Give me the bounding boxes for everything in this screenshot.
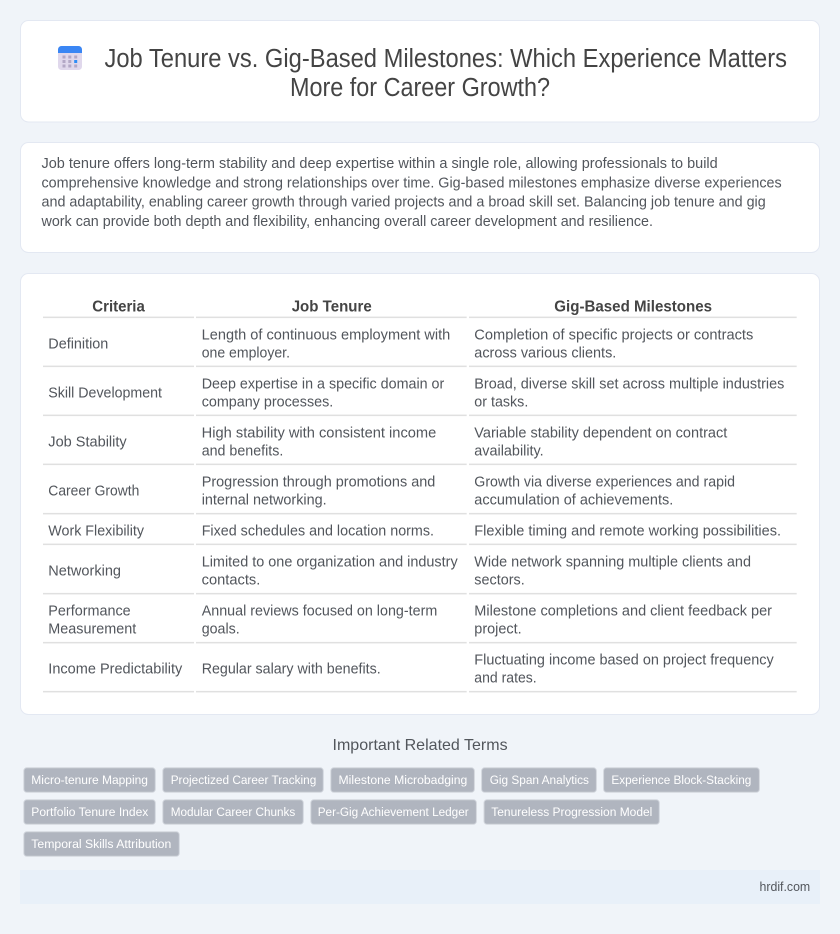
row: career growth — [48, 474, 735, 508]
row: skill development: company processes. — [202, 394, 333, 410]
row: networking: contacts. — [202, 572, 260, 588]
intro text: and adaptability, enabling career growth through varied projects and a broad skill set. Balancing job tenure and gig — [42, 195, 766, 211]
row: job stability — [48, 425, 727, 459]
table header row: Job Tenure — [292, 299, 372, 316]
row: career growth: accumulation of achievements. — [474, 492, 673, 508]
row: work flexibility — [48, 523, 781, 539]
tag: modular career chunks — [163, 800, 303, 824]
row: income predictability — [48, 652, 774, 686]
row: skill development: Skill Development — [48, 385, 162, 401]
row: networking: Limited to one organization and industry — [202, 554, 458, 570]
row: career growth: Progression through promotions and — [202, 474, 435, 490]
row: career growth: internal networking. — [202, 492, 327, 508]
row: job stability: Variable stability dependent on contract — [474, 425, 727, 441]
row: skill development: Deep expertise in a specific domain or — [202, 376, 444, 392]
row: definition: Definition — [48, 336, 108, 352]
table header row — [92, 299, 712, 316]
tag: tenureless progression model — [484, 800, 659, 824]
panel: introduction — [20, 142, 820, 252]
row: job stability: High stability with consistent income — [202, 425, 436, 441]
tag: micro-tenure mapping — [24, 768, 155, 792]
tag: experience block-stacking: Experience Block-Stacking — [611, 773, 751, 787]
row: performance measurement — [48, 603, 772, 637]
row: definition: one employer. — [202, 345, 290, 361]
table header row: Gig-Based Milestones — [554, 299, 712, 316]
row: work flexibility: Flexible timing and remote working possibilities. — [474, 523, 781, 539]
tag: projectized career tracking — [163, 768, 323, 792]
row: definition: Length of continuous employment with — [202, 327, 450, 343]
row: job stability: Job Stability — [48, 434, 127, 450]
tag: gig span analytics — [482, 768, 596, 792]
row: performance measurement: Milestone completions and client feedback per — [474, 603, 772, 619]
title: Job Tenure vs. Gig-Based Milestones: Which Experience Matters — [104, 45, 787, 73]
row: job stability: availability. — [474, 443, 544, 459]
row: skill development — [48, 376, 784, 410]
tag: experience block-stacking — [604, 768, 759, 792]
table header row: Criteria — [92, 299, 145, 316]
tag: tenureless progression model: Tenureless Progression Model — [491, 805, 652, 819]
tag: projectized career tracking: Projectized Career Tracking — [171, 773, 316, 787]
row: work flexibility: Work Flexibility — [48, 523, 145, 539]
row: income predictability: Income Predictability — [48, 661, 183, 677]
row: networking — [48, 554, 751, 588]
tag: temporal skills attribution — [24, 832, 179, 856]
tag: gig span analytics: Gig Span Analytics — [490, 773, 589, 787]
footer source text: hrdif.com — [760, 880, 810, 894]
title: More for Career Growth? — [290, 74, 550, 102]
row: income predictability: Fluctuating income based on project frequency — [474, 652, 774, 668]
tag: micro-tenure mapping: Micro-tenure Mapping — [31, 773, 148, 787]
tag: portfolio tenure index — [24, 800, 155, 824]
panel: header — [20, 20, 820, 122]
row: performance measurement: Performance — [48, 603, 131, 619]
row: performance measurement: Annual reviews focused on long-term — [202, 603, 437, 619]
intro text: Job tenure offers long-term stability and deep expertise within a single role, allowing professionals to build — [42, 156, 718, 172]
row: definition — [48, 327, 753, 361]
row: skill development: or tasks. — [474, 394, 528, 410]
row: performance measurement: project. — [474, 621, 522, 637]
row: performance measurement: Measurement — [48, 621, 136, 637]
row: networking: Wide network spanning multiple clients and — [474, 554, 751, 570]
intro text: work can provide both depth and flexibility, enhancing overall career development and resilience. — [41, 214, 653, 230]
row: skill development: Broad, diverse skill set across multiple industries — [474, 376, 784, 392]
intro text — [41, 156, 782, 230]
tag: per-gig achievement ledger: Per-Gig Achievement Ledger — [318, 805, 469, 819]
title — [104, 45, 787, 102]
row: income predictability: Regular salary with benefits. — [202, 661, 381, 677]
footer — [20, 870, 820, 904]
row: networking: Networking — [48, 563, 121, 579]
row: definition: across various clients. — [474, 345, 616, 361]
row: definition: Completion of specific projects or contracts — [474, 327, 753, 343]
tag: modular career chunks: Modular Career Chunks — [171, 805, 295, 819]
intro text: comprehensive knowledge and strong relationships over time. Gig-based milestones emphasize diverse experiences — [42, 175, 782, 191]
row: career growth: Growth via diverse experiences and rapid — [474, 474, 735, 490]
panel: comparison table — [20, 274, 820, 714]
row: performance measurement: goals. — [202, 621, 240, 637]
tag: milestone microbadging: Milestone Microbadging — [338, 773, 467, 787]
row: career growth: Career Growth — [48, 483, 139, 499]
tag: temporal skills attribution: Temporal Skills Attribution — [31, 837, 171, 851]
row: networking: sectors. — [474, 572, 525, 588]
icon: calendar — [58, 46, 82, 70]
heading: important related terms: Important Related Terms — [332, 737, 508, 754]
tag: milestone microbadging — [331, 768, 474, 792]
tag: portfolio tenure index: Portfolio Tenure Index — [31, 805, 149, 819]
row: job stability: and benefits. — [202, 443, 283, 459]
row: work flexibility: Fixed schedules and location norms. — [202, 523, 434, 539]
tag: per-gig achievement ledger — [311, 800, 476, 824]
related terms tags — [24, 768, 759, 856]
row: income predictability: and rates. — [474, 670, 537, 686]
